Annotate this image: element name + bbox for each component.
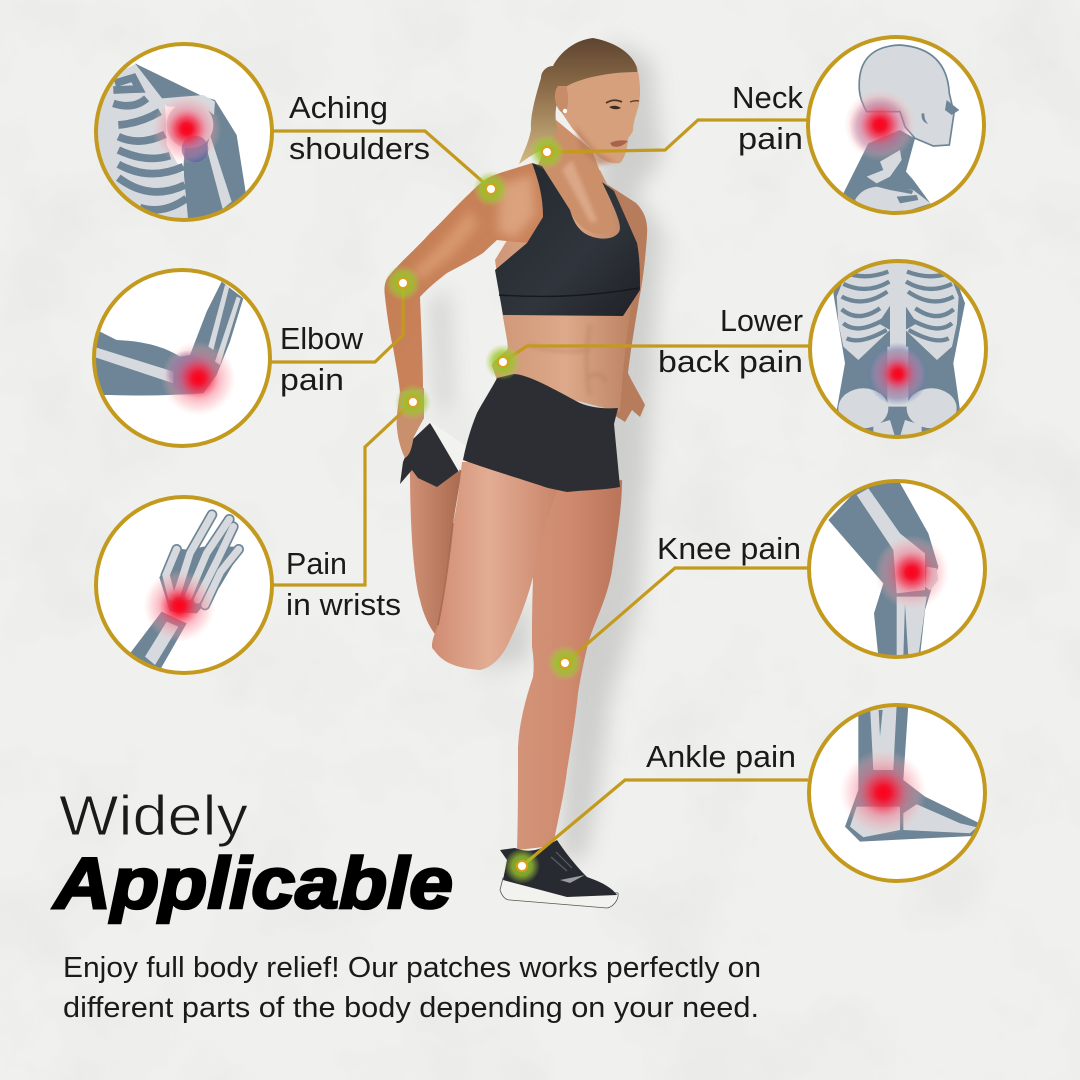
label: neck pain: pain	[738, 121, 803, 156]
leader line: neck	[547, 120, 808, 152]
label: pain in wrists: in wrists	[286, 587, 401, 622]
hand on raised foot	[397, 388, 424, 458]
shoulder and arm highlight	[412, 175, 535, 280]
neck tendon highlight	[562, 160, 598, 222]
marker: lower back	[485, 344, 521, 380]
raised lower leg	[410, 470, 462, 640]
description text: Enjoy full body relief! Our patches works perfectly on	[63, 952, 761, 984]
title	[52, 784, 453, 924]
label: lower back pain	[658, 303, 803, 379]
neck	[538, 120, 616, 234]
hair and ponytail	[519, 38, 637, 164]
label: pain in wrists	[286, 546, 401, 622]
label: lower back pain: Lower	[720, 303, 803, 338]
label: neck pain	[732, 80, 803, 156]
marker: wrist	[395, 384, 431, 420]
marker: ankle	[504, 848, 540, 884]
title: Applicable	[52, 844, 453, 924]
figure shadow on wall	[430, 40, 662, 860]
panel: elbow pain	[93, 270, 270, 446]
panel: ankle pain	[809, 705, 985, 881]
earring	[563, 109, 567, 113]
standing leg	[517, 480, 622, 850]
face details	[575, 100, 639, 165]
leader line: ankle	[522, 780, 808, 866]
panel: aching shoulders	[93, 44, 272, 225]
head and face	[560, 66, 640, 163]
label: elbow pain	[280, 321, 364, 397]
marker: elbow	[385, 265, 421, 301]
label: aching shoulders: shoulders	[289, 131, 430, 166]
leader line: knee	[565, 568, 808, 663]
ear	[555, 86, 568, 114]
leader line: elbow	[270, 283, 403, 362]
marker: neck	[529, 134, 565, 170]
standing shoe	[500, 840, 618, 908]
raised foot shoe	[400, 421, 466, 487]
label: lower back pain: back pain	[658, 344, 803, 379]
far arm and hand on hip	[602, 181, 647, 422]
title: Widely	[59, 784, 249, 848]
panel: knee pain	[809, 480, 985, 657]
abdominal shading	[530, 325, 606, 395]
panel: lower back pain	[810, 261, 986, 437]
label: aching shoulders	[289, 90, 430, 166]
label: ankle pain: Ankle pain	[646, 739, 796, 774]
panel: neck pain	[808, 37, 984, 213]
label: aching shoulders: Aching	[289, 90, 388, 125]
leader line: wrist	[272, 402, 413, 585]
marker: knee	[547, 645, 583, 681]
marker: shoulder	[473, 171, 509, 207]
near arm	[384, 163, 543, 456]
top band seam	[499, 288, 639, 296]
raised thigh	[432, 462, 560, 670]
description text	[63, 952, 761, 1024]
label: neck pain: Neck	[732, 80, 803, 115]
thigh crease	[438, 523, 453, 625]
label: elbow pain: pain	[280, 362, 344, 397]
label: elbow pain: Elbow	[280, 321, 364, 356]
shorts	[463, 374, 620, 492]
label: knee pain: Knee pain	[657, 531, 801, 566]
torso	[492, 170, 640, 412]
leader line: shoulders	[273, 131, 491, 189]
leader line: lower back	[503, 346, 810, 362]
sports top	[495, 163, 640, 316]
woman figure	[384, 38, 647, 908]
description text: different parts of the body depending on your need.	[63, 992, 759, 1024]
panel: wrist pain	[96, 497, 272, 673]
label: pain in wrists: Pain	[286, 546, 347, 581]
